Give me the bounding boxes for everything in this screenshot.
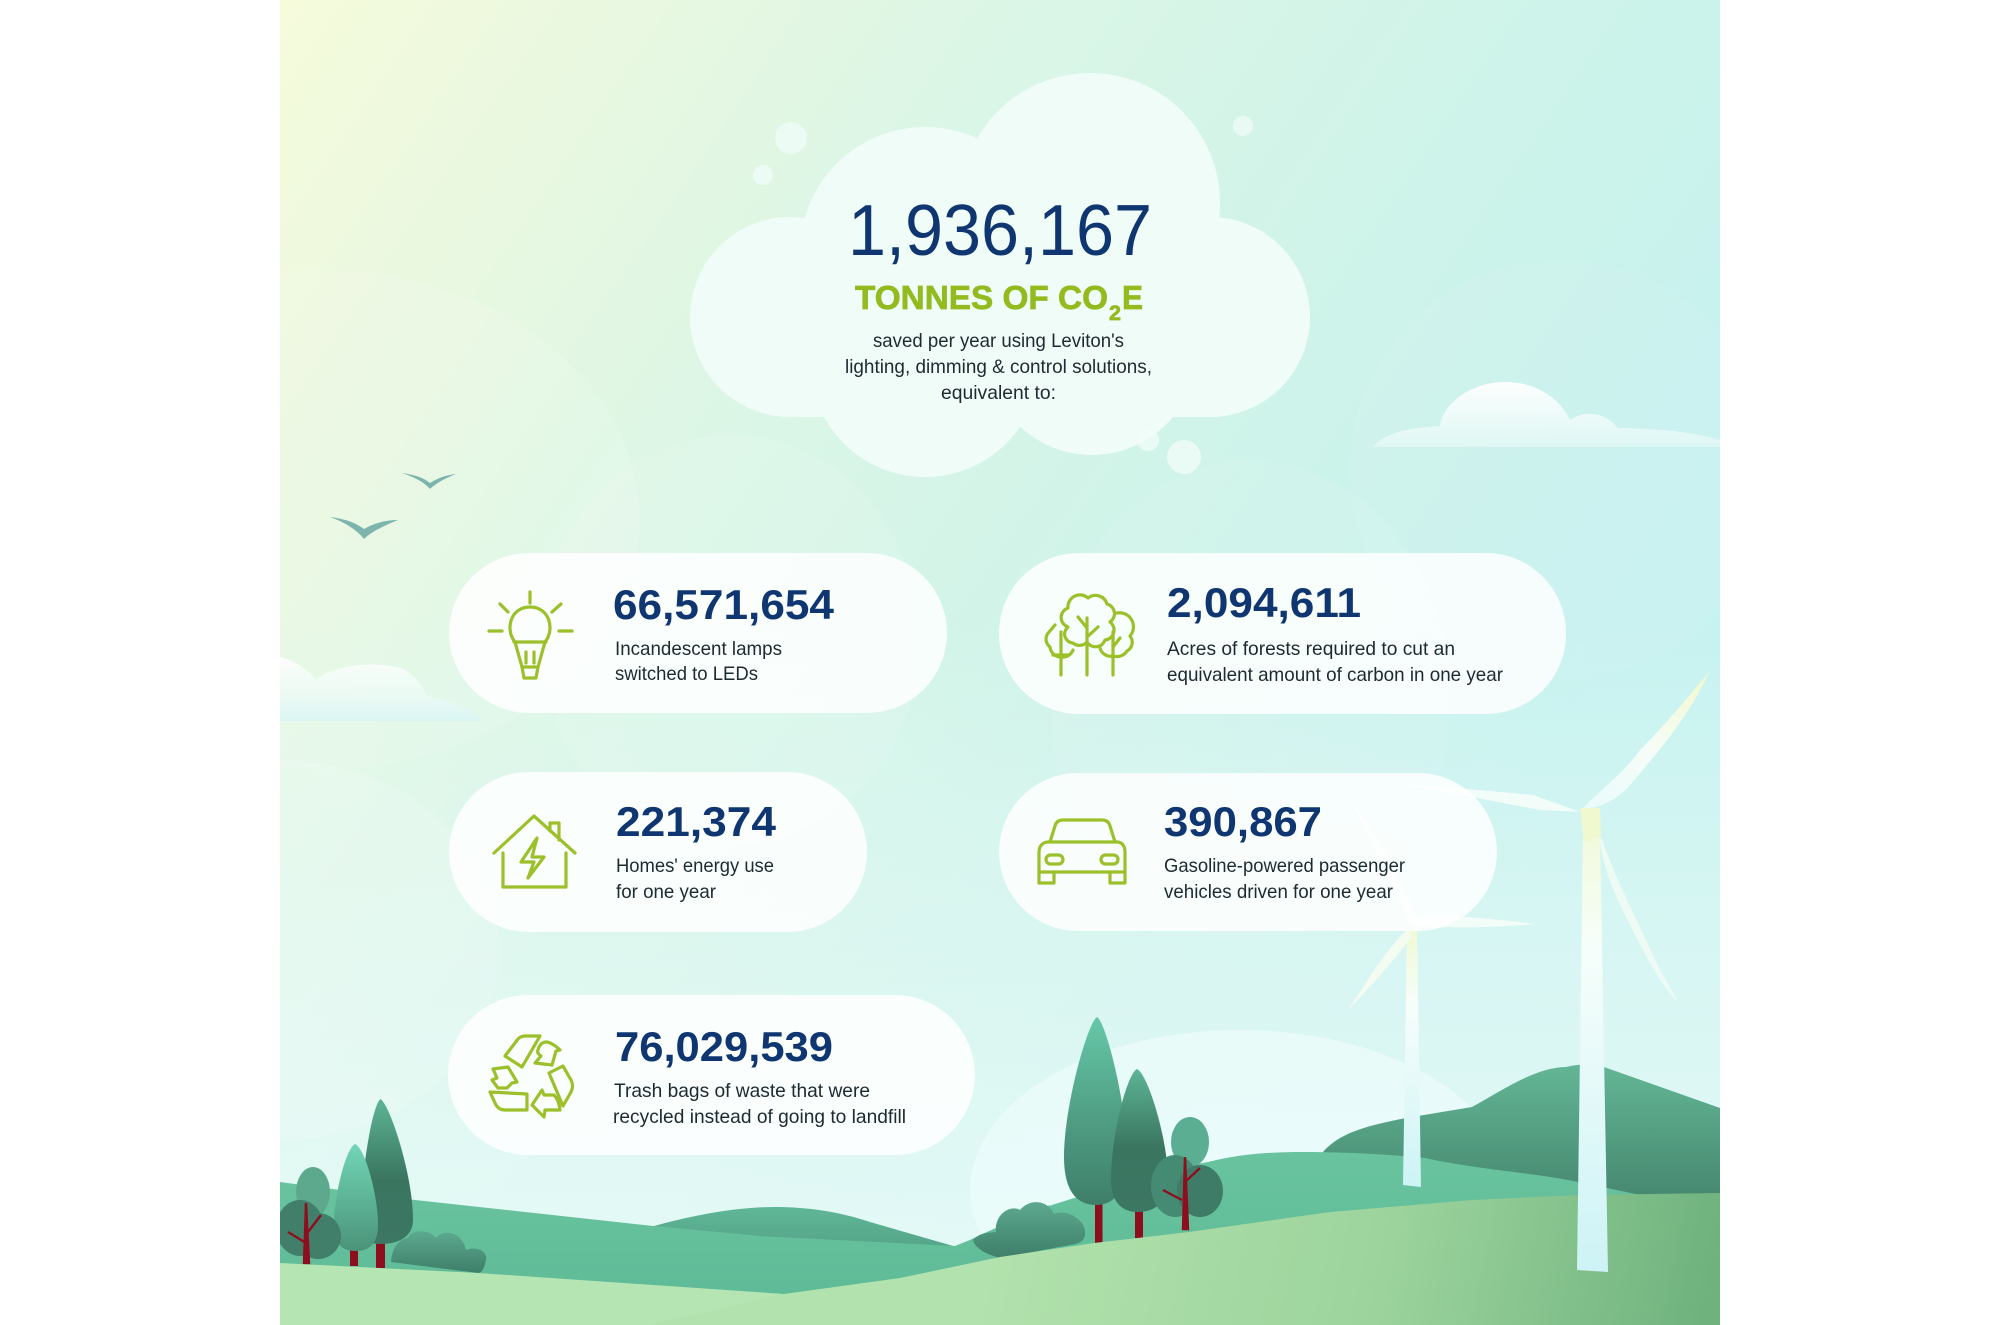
small bubble bottom 2	[1137, 429, 1159, 451]
stat: forests: 2,094,611	[1167, 579, 1361, 626]
birds	[330, 473, 456, 539]
subheading: tonnes of CO2e: 2	[1109, 302, 1121, 325]
icon: house with bolt	[494, 816, 575, 887]
icon: light bulb	[489, 592, 572, 678]
stat: vehicles: 390,867	[1164, 798, 1322, 845]
subheading: tonnes of CO2e: TONNES OF CO	[855, 279, 1108, 316]
description: lamps	[615, 638, 782, 685]
tree: centre second	[1111, 1069, 1168, 1238]
subheading: tonnes of CO2e	[855, 279, 1143, 325]
hill: mid left	[280, 1182, 1060, 1300]
icon: recycling arrows	[490, 1036, 572, 1117]
intro text: saved per year using Leviton's	[873, 330, 1124, 352]
tree: left middle	[334, 1144, 378, 1266]
intro text: lighting, dimming & control solutions,	[845, 356, 1152, 378]
hill: back centre	[640, 1207, 960, 1260]
hill: mid right	[970, 1152, 1650, 1300]
small bubble top left 1	[775, 122, 807, 154]
description: forests: equivalent amount of carbon in one year	[1167, 664, 1503, 686]
panel: forests	[999, 553, 1566, 714]
tree: centre tall	[1064, 1017, 1127, 1244]
wind turbine: small	[1348, 804, 1535, 1187]
description: trash bags: recycled instead of going to landfill	[613, 1106, 906, 1128]
stat: homes: 221,374	[616, 798, 777, 845]
icon: car	[1039, 820, 1125, 883]
hill: front right	[650, 1193, 1720, 1325]
description: lamps: Incandescent lamps	[615, 638, 782, 660]
subheading: tonnes of CO2e: E	[1122, 279, 1143, 316]
tree: left small	[276, 1167, 341, 1263]
description: vehicles	[1164, 855, 1405, 903]
description: trash bags: Trash bags of waste that were	[614, 1080, 870, 1102]
panel: trash bags	[448, 995, 975, 1155]
stat: lamps: 66,571,654	[613, 581, 835, 628]
main cloud	[690, 73, 1310, 477]
tree: centre small	[1151, 1117, 1223, 1229]
bush: centre	[973, 1202, 1085, 1258]
tree: left tall	[361, 1099, 413, 1268]
description: forests: Acres of forests required to cut an	[1167, 638, 1455, 660]
panel: lamps	[449, 553, 947, 713]
intro text: equivalent to:	[941, 382, 1056, 404]
icon: trees	[1046, 595, 1133, 675]
stat: trash bags: 76,029,539	[615, 1023, 833, 1070]
description: vehicles: vehicles driven for one year	[1164, 881, 1393, 903]
description: trash bags	[613, 1080, 906, 1128]
description: lamps: switched to LEDs	[615, 663, 758, 685]
hill: back right	[1323, 1065, 1720, 1230]
headline number: 1,936,167	[848, 191, 1152, 271]
bush: left	[391, 1231, 486, 1273]
intro text	[845, 330, 1152, 404]
panel: homes	[449, 772, 867, 932]
clouds: background right	[1373, 382, 1720, 447]
description: vehicles: Gasoline-powered passenger	[1164, 855, 1405, 877]
small bubble top right	[1233, 116, 1253, 136]
panel: sky background	[280, 0, 1720, 1246]
description: homes: for one year	[616, 881, 716, 903]
small bubble bottom 1	[1167, 440, 1201, 474]
description: homes: Homes' energy use	[616, 855, 774, 877]
small bubble top left 2	[753, 165, 773, 185]
description: homes	[616, 855, 774, 903]
clouds: background left	[280, 657, 485, 721]
panel: vehicles	[999, 773, 1497, 931]
description: forests	[1167, 638, 1503, 686]
wind turbine: large	[1400, 672, 1709, 1272]
hill: front left	[280, 1263, 784, 1325]
